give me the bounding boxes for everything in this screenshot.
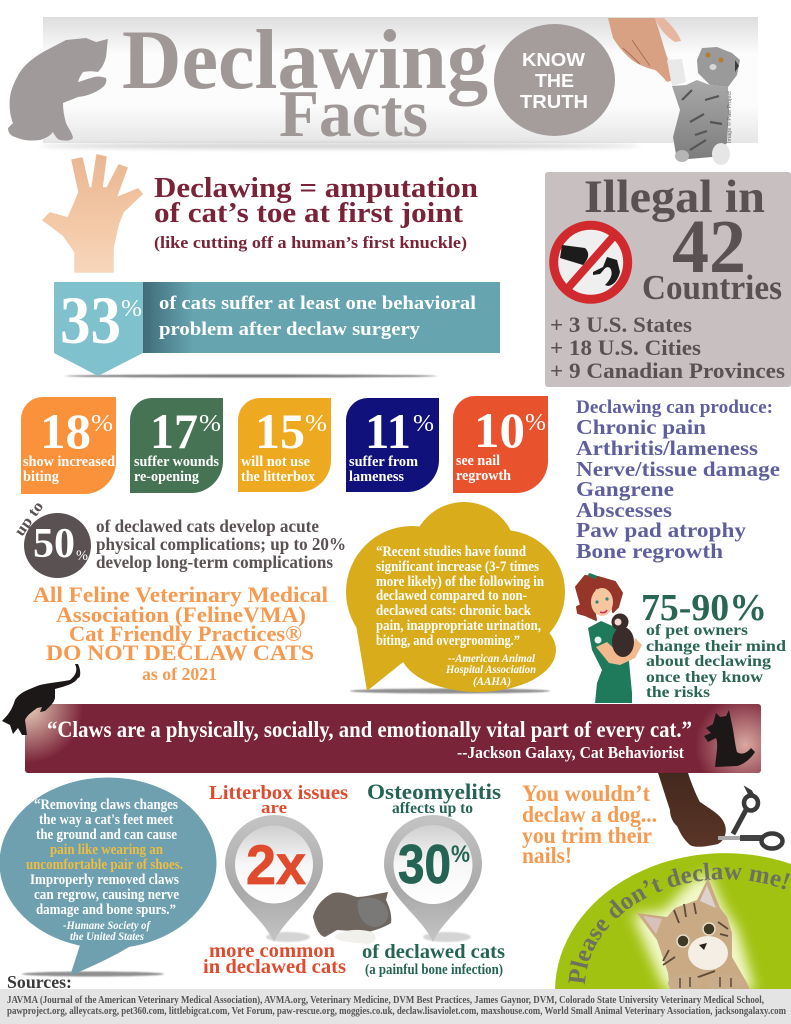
heading: declawing = amputation: of cat’s toe at first joint: [154, 197, 463, 229]
stat card: 15% litterbox: will not use: [241, 454, 311, 470]
stat: litterbox issues 2x: [203, 782, 348, 978]
speech bubble: humane society quote: the way a cat's feet meet: [39, 812, 173, 828]
stat: up to 50% complications: physical complications; up to 20%: [96, 534, 346, 554]
text block: you wouldn't declaw a dog: [522, 781, 657, 868]
text block: feline vma statement: All Feline Veterinary Medical: [33, 582, 328, 607]
panel: illegal in 42 countries: + 18 U.S. Cities: [550, 335, 701, 360]
speech bubble: AAHA quote: --American Animal: [448, 653, 536, 665]
stat card: 15% litterbox: [238, 398, 331, 492]
text block: feline vma statement: Cat Friendly Practices®: [69, 621, 302, 646]
callout: 33% behavioral problem: of cats suffer at least one behavioral: [159, 293, 476, 314]
stat: up to 50% complications: develop long-term complications: [96, 552, 333, 572]
icon: map pin 2x: 2x: [246, 833, 306, 896]
stat: 75-90% change their mind: of pet owners: [646, 622, 748, 639]
stat: 75-90% change their mind: once they know: [646, 669, 763, 686]
list: declawing can produce: Chronic pain: [576, 415, 706, 439]
list: declawing can produce: Nerve/tissue damage: [576, 457, 780, 481]
speech bubble: AAHA quote: (AAHA): [473, 676, 511, 688]
speech bubble: humane society quote: the ground and can cause: [36, 827, 178, 843]
callout: 33% behavioral problem: problem after declaw surgery: [159, 319, 421, 340]
stat: 75-90% change their mind: about declawing: [646, 653, 771, 670]
stat card: 17% wounds: suffer wounds: [134, 454, 219, 470]
heading: declawing = amputation: Declawing = amputation: [154, 172, 478, 204]
icon: map pin 2x: [225, 815, 323, 942]
stat card: 15% litterbox: %: [305, 411, 327, 437]
stat: osteomyelitis 30%: affects up to: [392, 800, 473, 817]
stat card: 11% lameness: [346, 398, 439, 492]
icon: gray kitten with bandaged paw: [313, 892, 391, 944]
icon: black cat standing: [704, 710, 755, 767]
icon: dog paw with clippers: [658, 773, 782, 848]
speech bubble: humane society quote: pain like wearing an: [50, 842, 163, 858]
badge: please don't declaw me: Please don’t declaw me!: [568, 862, 790, 984]
stat card: 10% regrowth: [453, 396, 548, 493]
stat: up to 50% complications: up to: [11, 498, 47, 539]
stat card: 10% regrowth: see nail: [456, 453, 500, 469]
stat card: 10% regrowth: 10: [474, 402, 525, 458]
speech bubble: AAHA quote: more likely) of the following in: [376, 574, 544, 590]
stat: up to 50% complications: %: [76, 548, 88, 564]
list: declawing can produce: Abscesses: [576, 498, 672, 522]
badge: know the truth: [494, 24, 615, 136]
icon: hand holding bandaged cat paw: Image © Paw Project: [726, 91, 733, 143]
panel: illegal in 42 countries: 42: [672, 205, 746, 289]
title: Declawing: [122, 13, 488, 107]
speech bubble: AAHA quote: [346, 502, 565, 694]
icon: cat silhouette: [8, 38, 108, 141]
stat card: 10% regrowth: regrowth: [456, 468, 511, 484]
icon: map pin 30%: %: [451, 841, 470, 868]
badge: know the truth: THE: [535, 70, 574, 91]
speech bubble: AAHA quote: significant increase (3-7 times: [376, 559, 539, 575]
icon: no claw sign: [554, 225, 628, 299]
text block: you wouldn't declaw a dog: declaw a dog...: [522, 802, 657, 827]
footer: sources: [0, 972, 791, 1024]
list: declawing can produce: Gangrene: [576, 477, 674, 501]
stat: up to 50% complications: 50: [33, 521, 75, 567]
icon: hand holding bandaged cat paw: [608, 18, 740, 165]
icon: tabby kitten: [637, 878, 750, 992]
panel: illegal in 42 countries: Countries: [642, 268, 782, 307]
text block: you wouldn't declaw a dog: You wouldn’t: [522, 781, 650, 806]
text block: feline vma statement: as of 2021: [142, 664, 217, 684]
stat card: 10% regrowth: %: [525, 410, 546, 436]
stat card: 18% biting: [21, 397, 116, 494]
icon: map pin 30%: 30: [398, 833, 451, 895]
callout: 33% behavioral problem: 33: [60, 282, 121, 358]
stat: 75-90% change their mind: 75-90%: [641, 587, 767, 629]
list: declawing can produce: Bone regrowth: [576, 539, 723, 563]
speech bubble: humane society quote: damage and bone spurs.”: [36, 902, 176, 918]
stat card: 11% lameness: lameness: [349, 469, 404, 485]
stat: 75-90% change their mind: [641, 587, 786, 701]
panel: illegal in 42 countries: + 9 Canadian Provinces: [550, 358, 785, 383]
speech bubble: AAHA quote: pain, inappropriate urination,: [376, 618, 541, 634]
stat: osteomyelitis 30%: [362, 779, 505, 978]
callout: 33% behavioral problem: [54, 282, 500, 378]
speech bubble: AAHA quote: biting, and overgrooming.”: [376, 633, 520, 649]
stat: up to 50% complications: [11, 498, 346, 578]
speech bubble: humane society quote: uncomfortable pair of shoes.: [26, 857, 183, 873]
speech bubble: humane society quote: “Removing claws changes: [34, 797, 178, 813]
speech bubble: AAHA quote: Hospital Association: [445, 664, 536, 676]
stat card: 18% biting: show increased: [23, 454, 115, 470]
stat card: 15% litterbox: the litterbox: [241, 469, 316, 485]
footer: sources: Sources:: [7, 972, 72, 992]
speech bubble: humane society quote: the United States: [70, 931, 144, 943]
panel: illegal in 42 countries: Illegal in: [584, 171, 765, 223]
icon: human hand with cut fingertips: [43, 155, 142, 272]
stat: osteomyelitis 30%: (a painful bone infection): [365, 962, 503, 978]
stat card: 11% lameness: %: [413, 411, 434, 437]
stat: 75-90% change their mind: change their mind: [646, 638, 786, 655]
stat: litterbox issues 2x: Litterbox issues: [209, 782, 348, 804]
speech bubble: humane society quote: Improperly removed claws: [30, 872, 179, 888]
text block: you wouldn't declaw a dog: nails!: [522, 843, 572, 868]
stat card: 18% biting: 18: [40, 403, 91, 459]
stat card: 11% lameness: 11: [365, 403, 411, 459]
text block: feline vma statement: DO NOT DECLAW CATS: [46, 640, 314, 665]
stat: osteomyelitis 30%: of declawed cats: [362, 941, 505, 963]
stat card: 17% wounds: [130, 398, 223, 493]
speech bubble: AAHA quote: declawed compared to non-: [376, 588, 527, 604]
header banner: [8, 17, 758, 149]
banner: jackson galaxy quote: “Claws are a physically, socially, and emotionally vital part of every cat.”: [47, 717, 692, 743]
stat: up to 50% complications: of declawed cats develop acute: [96, 516, 319, 536]
stat card: 11% lameness: suffer from: [349, 454, 418, 470]
banner: jackson galaxy quote: --Jackson Galaxy, Cat Behaviorist: [457, 743, 684, 762]
text block: you wouldn't declaw a dog: you trim their: [522, 823, 652, 848]
stat: litterbox issues 2x: are: [261, 798, 287, 817]
stat card: 15% litterbox: 15: [255, 403, 305, 459]
banner: jackson galaxy quote: [25, 704, 761, 773]
stat: litterbox issues 2x: more common: [209, 940, 336, 962]
heading: declawing = amputation: (like cutting off a human’s first knuckle): [154, 233, 467, 252]
title: [122, 13, 488, 151]
stat card: 17% wounds: re-opening: [134, 469, 200, 485]
stat: litterbox issues 2x: in declawed cats: [203, 956, 346, 978]
icon: black cat on banner: [2, 664, 80, 735]
stat card: 18% biting: biting: [23, 469, 60, 485]
panel: illegal in 42 countries: [545, 171, 791, 387]
icon: vet woman holding cat: [576, 573, 642, 703]
title: Facts: [279, 77, 428, 151]
stat: 75-90% change their mind: the risks: [646, 684, 710, 701]
stat card: 17% wounds: %: [199, 411, 221, 437]
speech bubble: AAHA quote: “Recent studies have found: [376, 544, 526, 560]
heading: declawing = amputation: [154, 172, 478, 252]
list: declawing can produce: Declawing can produce:: [576, 398, 773, 418]
callout: 33% behavioral problem: %: [121, 296, 142, 322]
list: declawing can produce: [576, 398, 780, 563]
speech bubble: humane society quote: can regrow, causing nerve: [34, 887, 180, 903]
text block: feline vma statement: Association (FelineVMA): [56, 602, 306, 627]
badge: know the truth: TRUTH: [520, 91, 588, 112]
list: declawing can produce: Arthritis/lameness: [576, 436, 758, 460]
list: declawing can produce: Paw pad atrophy: [576, 518, 746, 542]
speech bubble: humane society quote: -Humane Society of: [63, 920, 151, 932]
stat card: 18% biting: %: [91, 411, 113, 437]
icon: map pin 30%: [384, 815, 482, 942]
stat card: 17% wounds: 17: [150, 403, 198, 459]
panel: illegal in 42 countries: + 3 U.S. States: [550, 312, 692, 337]
speech bubble: AAHA quote: declawed cats: chronic back: [376, 603, 532, 619]
badge: know the truth: KNOW: [522, 49, 586, 70]
text block: feline vma statement: [33, 582, 328, 684]
speech bubble: humane society quote: [0, 778, 216, 976]
stat: osteomyelitis 30%: Osteomyelitis: [367, 779, 501, 804]
